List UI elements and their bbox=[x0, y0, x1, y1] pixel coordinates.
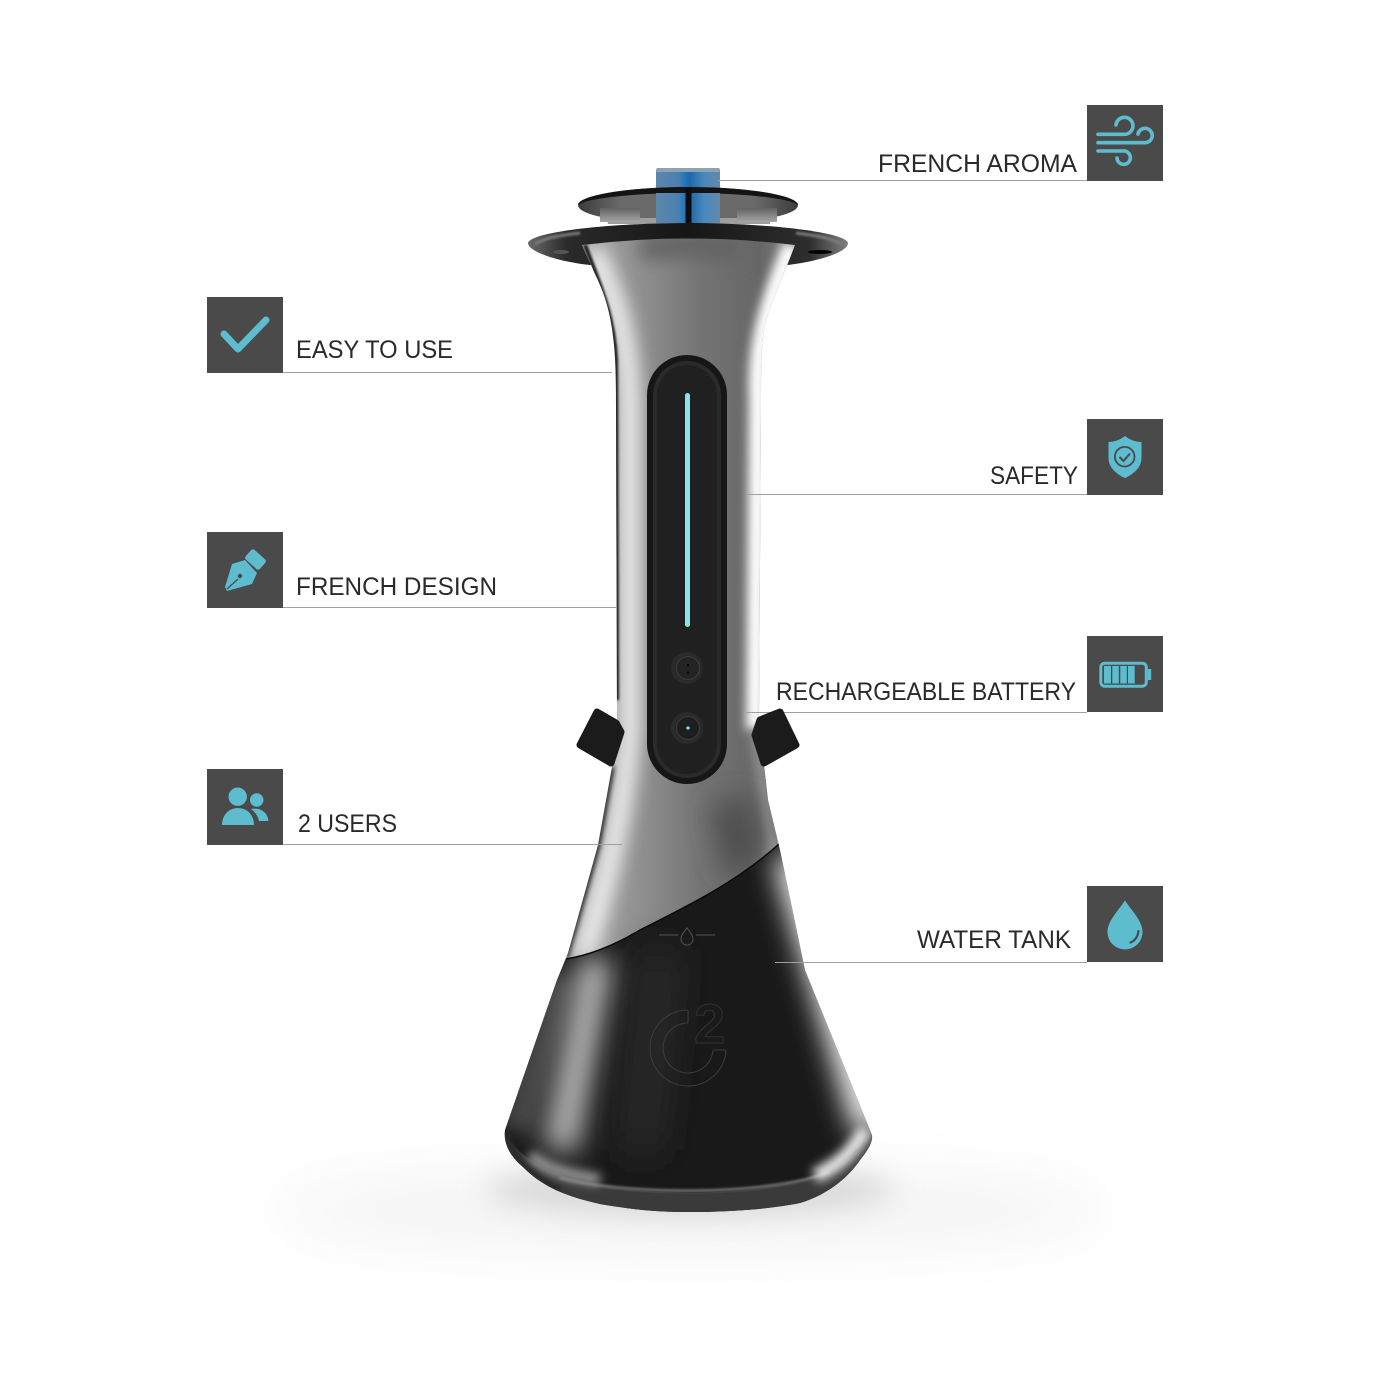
label: SAFETY bbox=[990, 462, 1078, 490]
floor shadow bbox=[270, 1164, 1110, 1250]
label: RECHARGEABLE BATTERY bbox=[776, 678, 1076, 706]
black water tank bbox=[504, 844, 872, 1212]
label: EASY TO USE bbox=[296, 336, 453, 364]
feature: water tank bbox=[917, 886, 1163, 962]
button: mist bbox=[671, 652, 703, 684]
left knob bbox=[580, 712, 621, 763]
upper neck under top disc bbox=[604, 204, 772, 224]
foot bbox=[505, 1135, 872, 1212]
leader lines bbox=[283, 180, 1087, 962]
icon: shield bbox=[1087, 419, 1163, 495]
icon: wind bbox=[1087, 105, 1163, 181]
control panel bbox=[647, 355, 727, 784]
label: FRENCH AROMA bbox=[878, 150, 1077, 178]
icon: battery bbox=[1087, 636, 1163, 712]
right knob bbox=[755, 712, 796, 763]
label: FRENCH DESIGN bbox=[296, 573, 497, 601]
feature: 2 users bbox=[207, 769, 397, 845]
icon: check mark bbox=[207, 297, 283, 373]
LED light bar bbox=[685, 393, 690, 627]
feature: safety bbox=[990, 419, 1163, 495]
feature: rechargeable battery bbox=[776, 636, 1163, 712]
top disc bbox=[578, 187, 798, 223]
feature: french aroma bbox=[878, 105, 1163, 181]
label: WATER TANK bbox=[917, 926, 1071, 954]
button: power bbox=[671, 712, 703, 744]
feature: french design bbox=[207, 532, 497, 608]
icon: fountain pen nib bbox=[207, 532, 283, 608]
embossed logo bbox=[650, 992, 726, 1086]
embossed logo: 2 bbox=[694, 992, 725, 1055]
aluminium sleeve bbox=[566, 238, 795, 959]
product: diffuser device bbox=[504, 168, 872, 1212]
body bbox=[504, 238, 872, 1212]
label: 2 USERS bbox=[298, 810, 397, 838]
icon: two users bbox=[207, 769, 283, 845]
bottom flange bbox=[528, 223, 848, 265]
water level mark bbox=[659, 928, 715, 945]
seam bbox=[566, 843, 780, 959]
blue aroma cartridge bbox=[656, 168, 720, 225]
icon: water drop bbox=[1087, 886, 1163, 962]
feature: easy to use bbox=[207, 297, 453, 373]
